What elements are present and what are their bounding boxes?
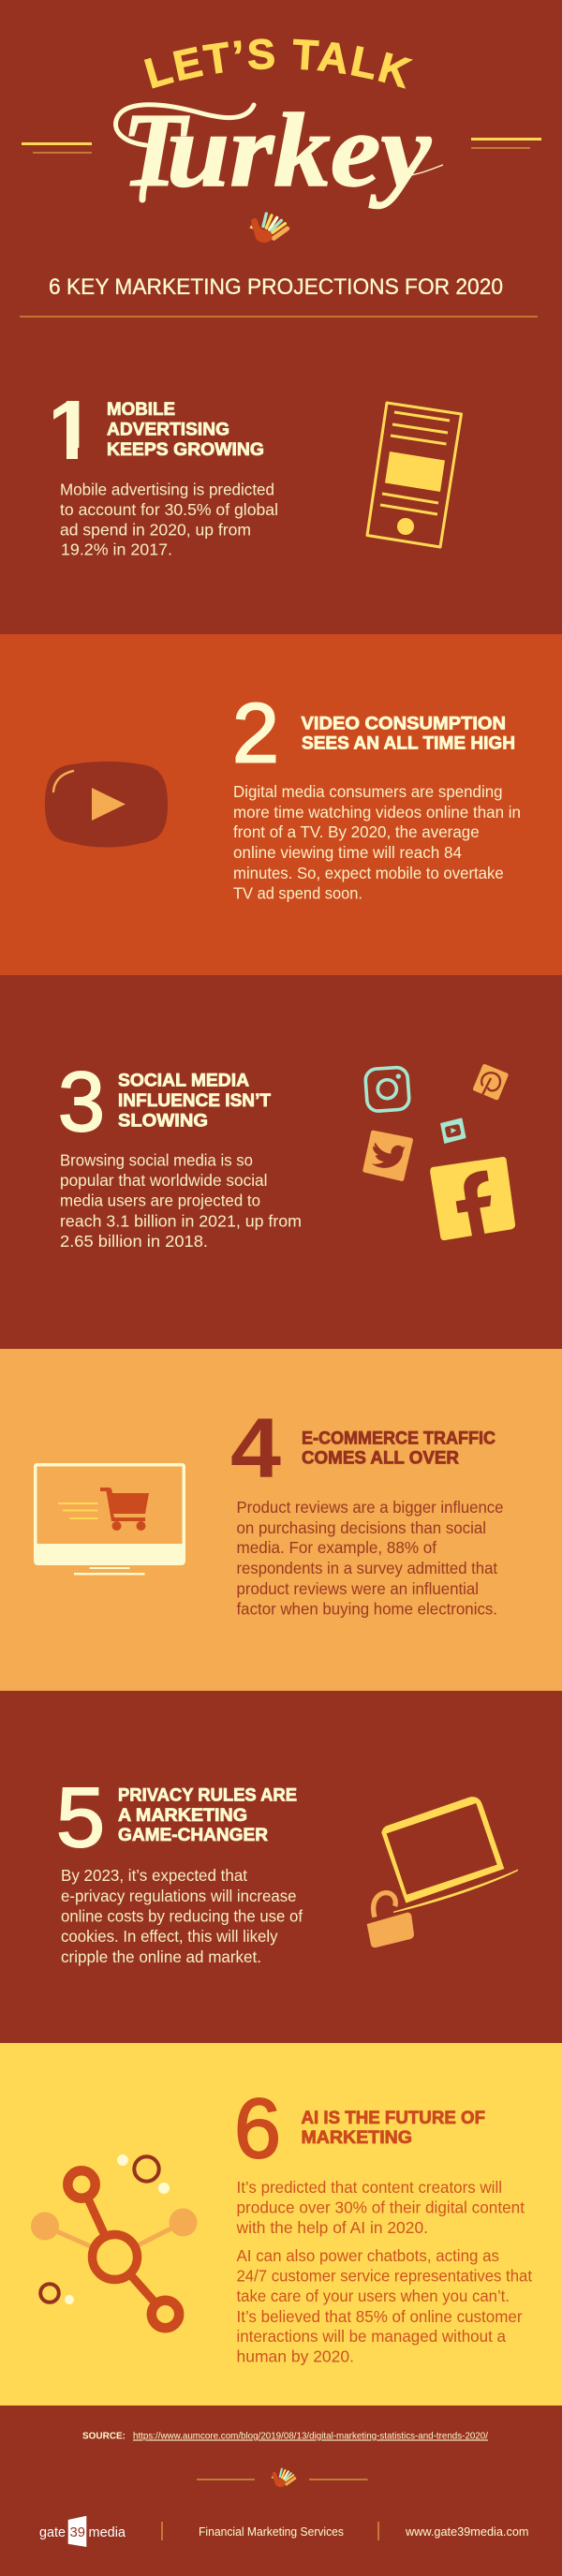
body text 5 (61, 1866, 303, 1966)
body text 4: Product reviews are a bigger influence (236, 1498, 504, 1517)
body text 3: 2.65 billion in 2018. (60, 1232, 208, 1251)
body text 3: Browsing social media is so (60, 1150, 253, 1169)
panel: section 2 video consumption (0, 634, 562, 975)
icon: phone (367, 403, 461, 547)
body text 2: minutes. So, expect mobile to overtake (233, 864, 504, 882)
body text 2: more time watching videos online than in (233, 803, 521, 822)
body text 3: reach 3.1 billion in 2021, up from (60, 1212, 302, 1231)
heading 2: VIDEO CONSUMPTION (302, 714, 506, 734)
heading 1 (107, 400, 264, 460)
heading 5: PRIVACY RULES ARE (118, 1785, 297, 1806)
icon: small turkey (272, 2469, 295, 2487)
heading 5 (118, 1785, 297, 1845)
body text 6: It’s believed that 85% of online customer (236, 2307, 523, 2326)
body text 1: Mobile advertising is predicted (60, 480, 274, 498)
body text 2: front of a TV. By 2020, the average (233, 822, 480, 841)
body text 6: It’s predicted that content creators will (236, 2178, 502, 2197)
footer divider lines (197, 2479, 367, 2480)
panel: section 4 e-commerce (0, 1349, 562, 1691)
heading 3: SLOWING (118, 1111, 208, 1132)
body text 4: product reviews were an influential (236, 1579, 479, 1598)
header panel (20, 38, 541, 318)
body text 6 (236, 2178, 532, 2366)
body text 4: on purchasing decisions than social (236, 1518, 486, 1537)
icon: youtube (441, 1118, 466, 1143)
logo: gate 39 media: media (88, 2524, 126, 2540)
heading 5: GAME-CHANGER (118, 1826, 268, 1845)
heading 3: INFLUENCE ISN’T (118, 1091, 271, 1111)
body text 1 (60, 480, 278, 558)
heading 1: ADVERTISING (107, 420, 229, 440)
heading 5: A MARKETING (118, 1806, 247, 1826)
title: let's talk: LET’S TALK (144, 38, 413, 89)
body text 2: TV ad spend soon. (233, 884, 362, 903)
body text 6: AI can also power chatbots, acting as (236, 2246, 499, 2265)
heading 4 (302, 1429, 495, 1469)
panel: section 1 mobile advertising (53, 401, 463, 555)
panel: section 6 AI (0, 2043, 562, 2406)
number 1 (53, 401, 79, 459)
heading 2 (302, 714, 515, 753)
number 5: 5 (56, 1771, 105, 1865)
heading 1: KEEPS GROWING (107, 440, 264, 460)
heading 1: MOBILE (107, 400, 175, 420)
body text 4 (236, 1498, 504, 1619)
heading 6: MARKETING (302, 2128, 412, 2148)
decorative lines right (471, 138, 541, 149)
icon: instagram (364, 1067, 410, 1112)
heading 3: SOCIAL MEDIA (118, 1072, 249, 1090)
body text 2: online viewing time will reach 84 (233, 843, 462, 862)
body text 3 (60, 1150, 302, 1251)
icons: social media (364, 1066, 515, 1240)
icon: network (31, 2154, 197, 2328)
title: turkey: urkey (167, 93, 432, 209)
logo: gate 39 media (39, 2516, 126, 2547)
body text 6: with the help of AI in 2020. (236, 2218, 428, 2237)
number 4: 4 (230, 1401, 281, 1495)
logo: gate 39 media: 39 (69, 2524, 85, 2540)
body text 5: cookies. In effect, this will likely (61, 1927, 278, 1946)
body text 3: popular that worldwide social (60, 1171, 268, 1190)
icon: cart (100, 1488, 149, 1531)
heading 2: SEES AN ALL TIME HIGH (302, 734, 515, 753)
number 6: 6 (234, 2082, 281, 2176)
body text 4: media. For example, 88% of (236, 1538, 436, 1557)
body text 4: respondents in a survey admitted that (236, 1559, 497, 1577)
number 2: 2 (232, 688, 279, 781)
icon: laptop with lock (367, 1797, 518, 1947)
number 1: 1 (48, 384, 95, 478)
icon: twitter (365, 1133, 411, 1179)
subtitle: 6 KEY MARKETING PROJECTIONS FOR 2020 (49, 274, 503, 300)
website: www.gate39media.com (405, 2524, 528, 2539)
panel: footer (0, 2406, 562, 2576)
icon: facebook (430, 1157, 515, 1240)
heading 4: COMES ALL OVER (302, 1448, 459, 1469)
body text 6: interactions will be managed without a (236, 2327, 506, 2346)
body text 3: media users are projected to (60, 1192, 260, 1210)
source line: https://www.aumcore.com/blog/2019/08/13/digital-marketing-statistics-and-trends-2020/ (133, 2430, 488, 2441)
icon: turkey (249, 214, 288, 243)
body text 5: cripple the online ad market. (61, 1947, 261, 1966)
body text 5: online costs by reducing the use of (61, 1907, 303, 1926)
heading 6: AI IS THE FUTURE OF (302, 2109, 485, 2128)
source line: SOURCE: (82, 2430, 126, 2441)
body text 6: human by 2020. (236, 2347, 354, 2366)
body text 5: e-privacy regulations will increase (61, 1887, 296, 1905)
title: turkey: T (122, 93, 190, 209)
body text 1: ad spend in 2020, up from (60, 521, 251, 540)
icon: pinterest (475, 1066, 506, 1098)
logo: gate 39 media: gate (39, 2524, 66, 2540)
body text 6: take care of your users when you can’t. (236, 2287, 510, 2305)
decorative lines left (22, 142, 92, 154)
body text 5: By 2023, it’s expected that (61, 1866, 247, 1885)
body text 2: Digital media consumers are spending (233, 782, 502, 801)
body text 1: to account for 30.5% of global (60, 500, 278, 519)
divider line (20, 316, 538, 318)
panel: section 3 social media (0, 975, 562, 1349)
body text 6: 24/7 customer service representatives that (236, 2267, 532, 2286)
body text 4: factor when buying home electronics. (236, 1600, 497, 1619)
heading 3 (118, 1072, 271, 1132)
icon: monitor with cart (34, 1463, 185, 1576)
number 3: 3 (58, 1056, 105, 1149)
tagline: Financial Marketing Services (199, 2524, 344, 2539)
heading 4: E-COMMERCE TRAFFIC (302, 1429, 495, 1448)
body text 6: produce over 30% of their digital content (236, 2198, 525, 2216)
body text 2 (233, 782, 521, 903)
vertical dividers (161, 2522, 379, 2540)
body text 1: 19.2% in 2017. (61, 540, 172, 558)
icon: video player (45, 762, 168, 847)
panel: section 5 privacy (0, 1691, 562, 2043)
heading 6 (302, 2109, 485, 2148)
